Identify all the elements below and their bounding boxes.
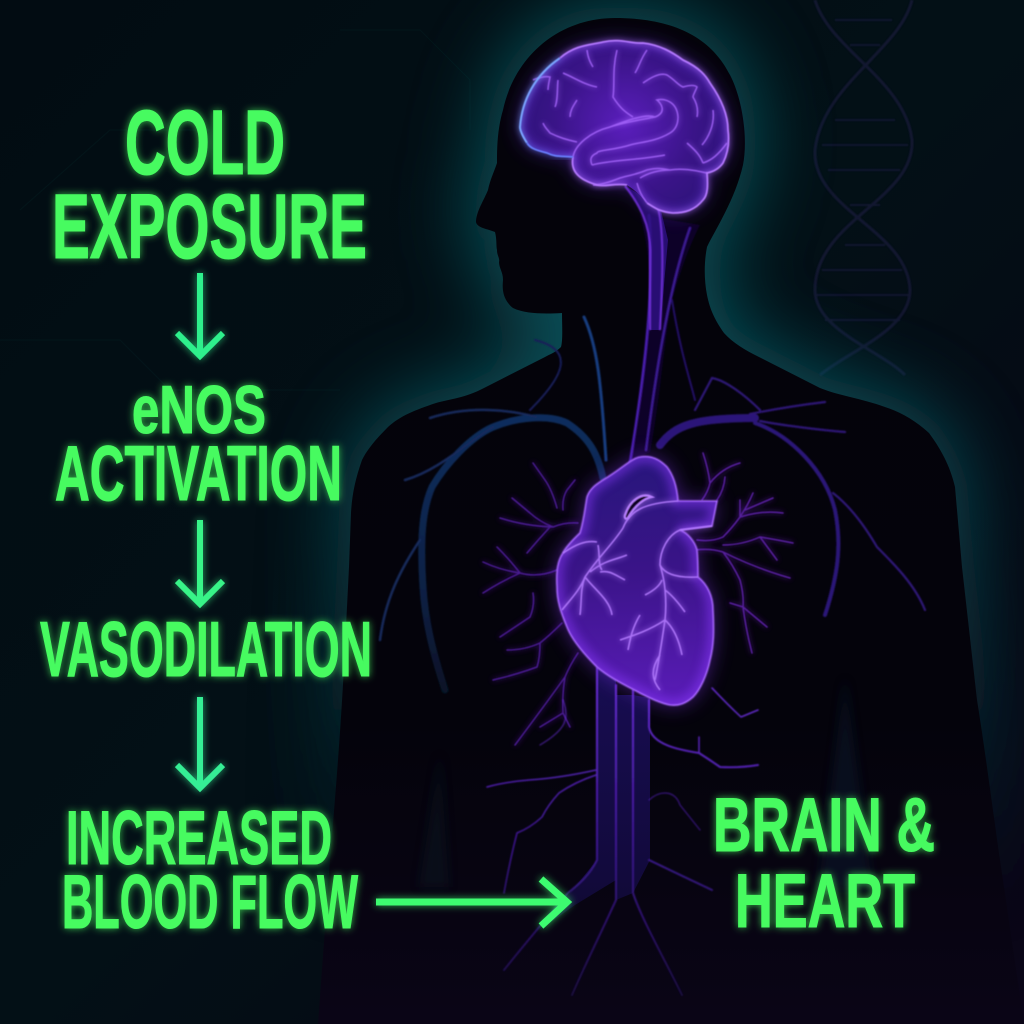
faint circuit traces <box>0 30 470 390</box>
text: eNOS activation <box>55 372 342 517</box>
text: cold exposure: EXPOSURE <box>52 176 367 278</box>
text: cold exposure: COLD <box>125 92 285 194</box>
human silhouette <box>318 18 1024 1024</box>
blue vessels <box>380 317 606 690</box>
right arteries <box>660 378 925 615</box>
text: brain and heart <box>713 783 935 944</box>
arrow 3 <box>177 697 223 788</box>
text: brain and heart: BRAIN & <box>713 783 935 868</box>
heart details <box>562 501 712 690</box>
pulmonary arch hole <box>625 496 652 519</box>
text: increased blood flow: INCREASED <box>66 796 332 881</box>
brain <box>520 41 729 330</box>
arrow 2 <box>177 520 223 604</box>
branching vessels left <box>483 463 578 745</box>
brain stem <box>625 186 668 330</box>
text: increased blood flow: BLOOD FLOW <box>62 860 358 945</box>
text: eNOS activation: ACTIVATION <box>55 429 342 517</box>
heart <box>557 457 717 705</box>
arrow 1 <box>177 273 223 356</box>
text: eNOS activation: eNOS <box>132 372 266 448</box>
descending aorta <box>487 665 758 995</box>
arrow 4 <box>376 879 567 926</box>
text: vasodilation: VASODILATION <box>40 605 372 693</box>
text: cold exposure <box>52 92 367 278</box>
neck arteries <box>630 215 700 462</box>
temporal lobe and folds <box>533 50 727 203</box>
limb gaps <box>818 677 873 890</box>
text: increased blood flow <box>62 796 358 945</box>
branching vessels right <box>695 453 793 653</box>
text: brain and heart: HEART <box>735 859 915 944</box>
brain outline <box>520 58 560 143</box>
DNA helix <box>815 0 912 375</box>
